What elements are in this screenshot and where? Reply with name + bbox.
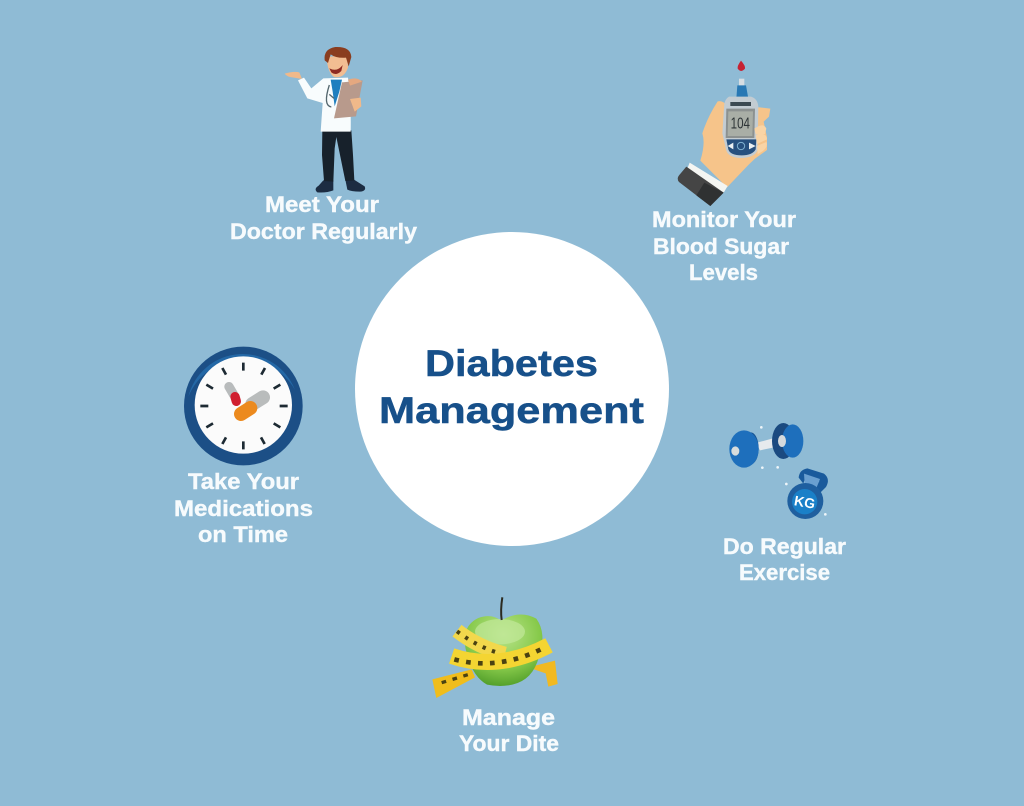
label: take your medications: Medications bbox=[174, 496, 313, 521]
label: monitor blood sugar: Monitor Your bbox=[652, 207, 796, 232]
label: do regular exercise: Do Regular bbox=[723, 534, 846, 559]
icon: dumbbell and kettlebell: KG bbox=[793, 492, 817, 512]
label: manage your diet: Your Dite bbox=[459, 731, 559, 756]
icon: clock with pills bbox=[184, 347, 303, 465]
icon: dumbbell and kettlebell bbox=[729, 423, 828, 519]
label: do regular exercise bbox=[723, 534, 846, 585]
label: manage your diet bbox=[459, 705, 559, 756]
label: take your medications bbox=[174, 469, 313, 547]
title: Management bbox=[379, 390, 644, 431]
label: take your medications: on Time bbox=[198, 522, 288, 547]
label: take your medications: Take Your bbox=[188, 469, 299, 494]
label: meet your doctor bbox=[230, 192, 418, 244]
icon: glucose meter in hand bbox=[678, 61, 770, 206]
label: monitor blood sugar bbox=[652, 207, 796, 285]
label: monitor blood sugar: Levels bbox=[689, 260, 758, 285]
label: meet your doctor: Doctor Regularly bbox=[230, 219, 418, 244]
label: do regular exercise: Exercise bbox=[739, 560, 830, 585]
icon: glucose meter in hand: 104 bbox=[731, 116, 750, 133]
icon: apple with tape measure bbox=[432, 597, 558, 698]
label: monitor blood sugar: Blood Sugar bbox=[653, 234, 789, 259]
label: meet your doctor: Meet Your bbox=[265, 192, 379, 217]
central circle bbox=[355, 232, 669, 546]
title: Diabetes bbox=[425, 343, 598, 384]
label: manage your diet: Manage bbox=[462, 705, 555, 730]
icon: doctor bbox=[285, 47, 365, 192]
title bbox=[379, 343, 644, 431]
